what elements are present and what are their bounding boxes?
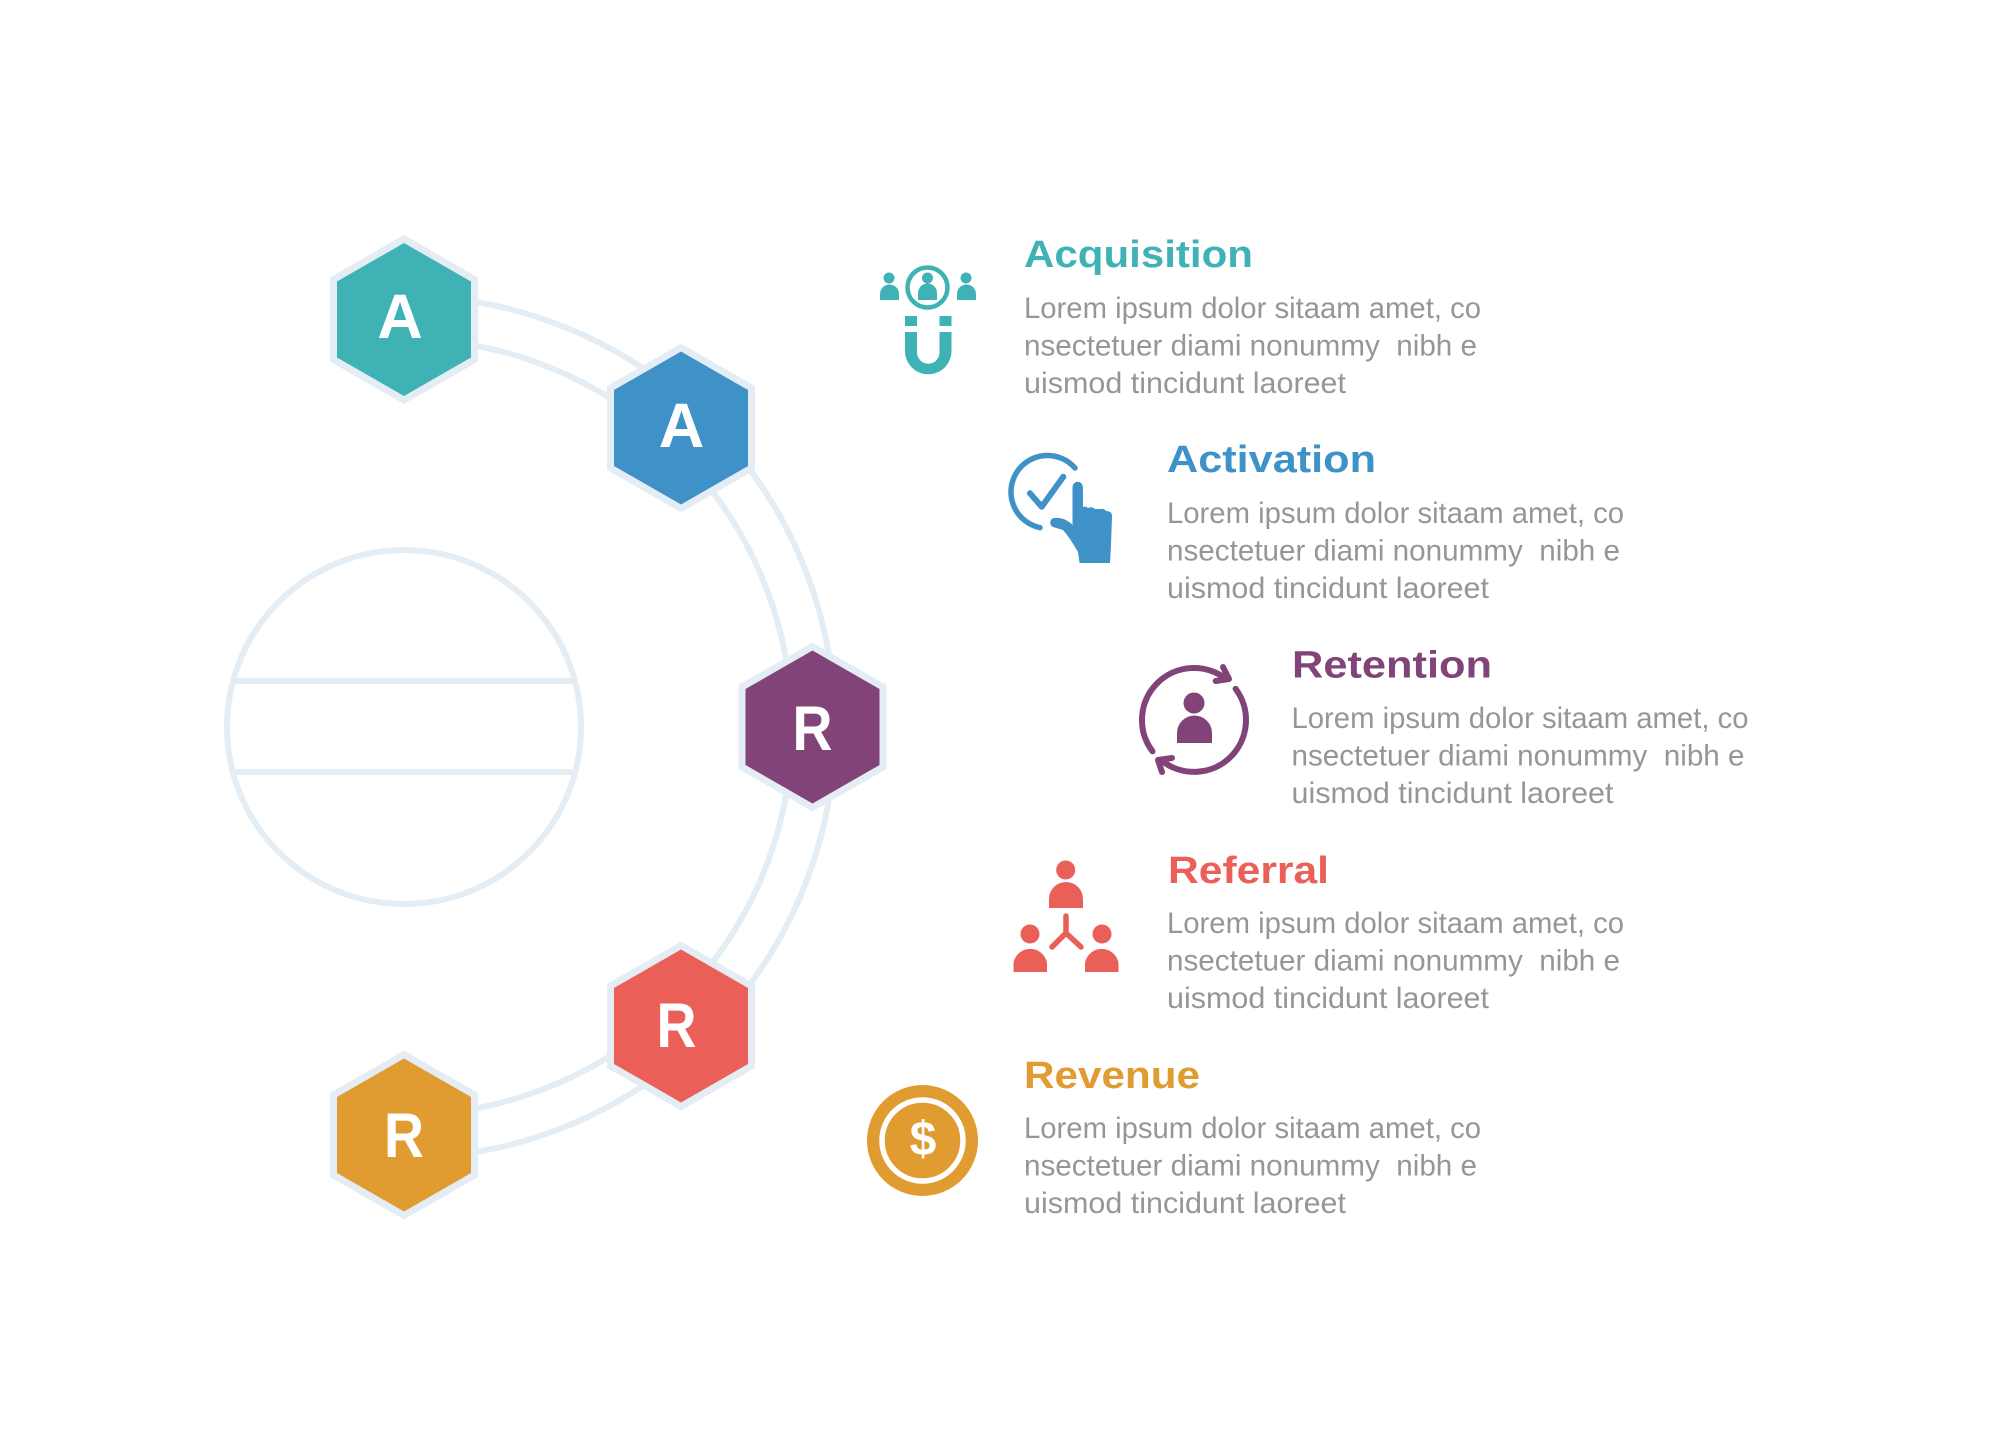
curved double track (404, 296, 835, 1158)
text block: acquisition description: nsectetuer diami nonummy nibh e (1024, 330, 1477, 362)
diagram: AARRR ring with hexagons (227, 239, 883, 1216)
hexagon: A acquisition: A (377, 282, 423, 352)
text block: retention description: nsectetuer diami nonummy nibh e (1292, 740, 1744, 772)
text block: revenue description: uismod tincidunt laoreet (1024, 1187, 1347, 1220)
icon: dollar coin (867, 1085, 978, 1196)
hexagon: R referral: R (656, 991, 696, 1061)
text block: referral description: Lorem ipsum dolor sitaam amet, co (1167, 907, 1624, 940)
text block: retention description: Lorem ipsum dolor sitaam amet, co (1292, 702, 1748, 735)
heading: Referral: Referral (1168, 850, 1329, 892)
icon: user with cycle arrows (1142, 667, 1246, 772)
hexagon: A activation (610, 348, 752, 508)
text block: acquisition description: Lorem ipsum dolor sitaam amet, co (1024, 292, 1481, 325)
text block: acquisition description: uismod tincidunt laoreet (1024, 367, 1347, 400)
panel: revenue (867, 1055, 1481, 1220)
text block: activation description (1167, 497, 1624, 605)
hexagon: R referral (610, 946, 752, 1106)
icon: one person referring two people (1014, 860, 1118, 972)
hexagon: R revenue: R (384, 1101, 424, 1171)
panel: activation (1011, 439, 1624, 605)
heading: Acquisition: Acquisition (1024, 234, 1253, 276)
text block: activation description: nsectetuer diami nonummy nibh e (1167, 534, 1620, 568)
text block: acquisition description (1024, 292, 1481, 400)
hexagon: R retention (742, 646, 883, 808)
text block: revenue description: Lorem ipsum dolor sitaam amet, co (1024, 1112, 1481, 1145)
central circle with empty label band (227, 550, 581, 904)
text block: revenue description: nsectetuer diami nonummy nibh e (1024, 1150, 1477, 1182)
icon: magnet attracting people (880, 268, 976, 374)
text block: referral description: uismod tincidunt laoreet (1167, 982, 1490, 1015)
heading: Retention: Retention (1292, 644, 1492, 686)
text block: activation description: uismod tincidunt laoreet (1167, 572, 1490, 605)
panel: referral (1014, 850, 1624, 1015)
text block: activation description: Lorem ipsum dolor sitaam amet, co (1167, 497, 1624, 530)
text block: referral description: nsectetuer diami nonummy nibh e (1167, 944, 1620, 978)
icon: hand tapping check mark (1011, 455, 1112, 563)
icon: dollar coin: $ (910, 1113, 937, 1166)
text block: referral description (1167, 907, 1624, 1015)
text block: retention description (1292, 702, 1748, 810)
heading: Revenue: Revenue (1024, 1055, 1200, 1097)
panel: retention (1142, 644, 1748, 810)
hexagon: R revenue (334, 1054, 474, 1216)
hexagon: A activation: A (659, 391, 704, 461)
hexagon: A acquisition (334, 239, 474, 400)
text block: revenue description (1024, 1112, 1481, 1220)
hexagon: R retention: R (792, 694, 832, 764)
panel: acquisition (880, 234, 1481, 400)
text block: retention description: uismod tincidunt laoreet (1292, 777, 1614, 810)
heading: Activation: Activation (1167, 439, 1376, 481)
